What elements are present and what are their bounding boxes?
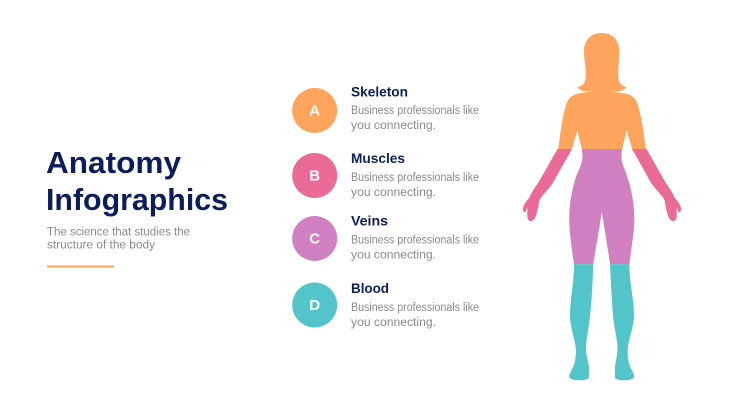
badge C <box>292 216 337 261</box>
description B <box>351 172 479 199</box>
description D <box>351 302 479 329</box>
body: hips and thighs <box>569 149 634 264</box>
body: left arm <box>523 149 572 221</box>
heading: skeleton: Skeleton <box>351 84 408 100</box>
description C <box>351 234 479 262</box>
item B: muscles <box>292 150 479 199</box>
badge C: C <box>309 230 320 248</box>
description B: Business professionals like <box>351 172 479 184</box>
badge B: B <box>309 168 320 184</box>
body: right leg <box>610 264 634 380</box>
subtitle: The science that studies the <box>47 226 190 238</box>
badge B <box>292 153 337 198</box>
description A <box>351 105 479 132</box>
description A: Business professionals like <box>351 105 479 117</box>
badge A <box>292 88 337 133</box>
badge D: D <box>309 297 320 314</box>
description A: you connecting. <box>351 120 436 132</box>
body: left leg <box>569 264 593 380</box>
body figure <box>523 33 681 380</box>
description B: you connecting. <box>351 187 436 199</box>
item C: veins <box>292 212 479 262</box>
subtitle: structure of the body <box>47 240 155 252</box>
description D: you connecting. <box>351 317 436 329</box>
item D: blood <box>292 280 479 329</box>
title: Infographics <box>46 182 228 217</box>
badge A: A <box>309 102 320 120</box>
item A: skeleton <box>292 84 479 133</box>
title <box>46 145 228 217</box>
description D: Business professionals like <box>351 302 479 314</box>
title: Anatomy <box>46 145 182 180</box>
body: head and torso <box>558 33 646 149</box>
body: right arm <box>632 149 681 221</box>
heading: veins: Veins <box>351 212 388 228</box>
heading: muscles: Muscles <box>351 150 405 166</box>
badge D <box>292 282 337 328</box>
description C: Business professionals like <box>351 234 479 246</box>
accent line <box>47 266 114 268</box>
description C: you connecting. <box>351 250 436 262</box>
heading: blood: Blood <box>351 280 389 296</box>
subtitle <box>47 226 190 252</box>
